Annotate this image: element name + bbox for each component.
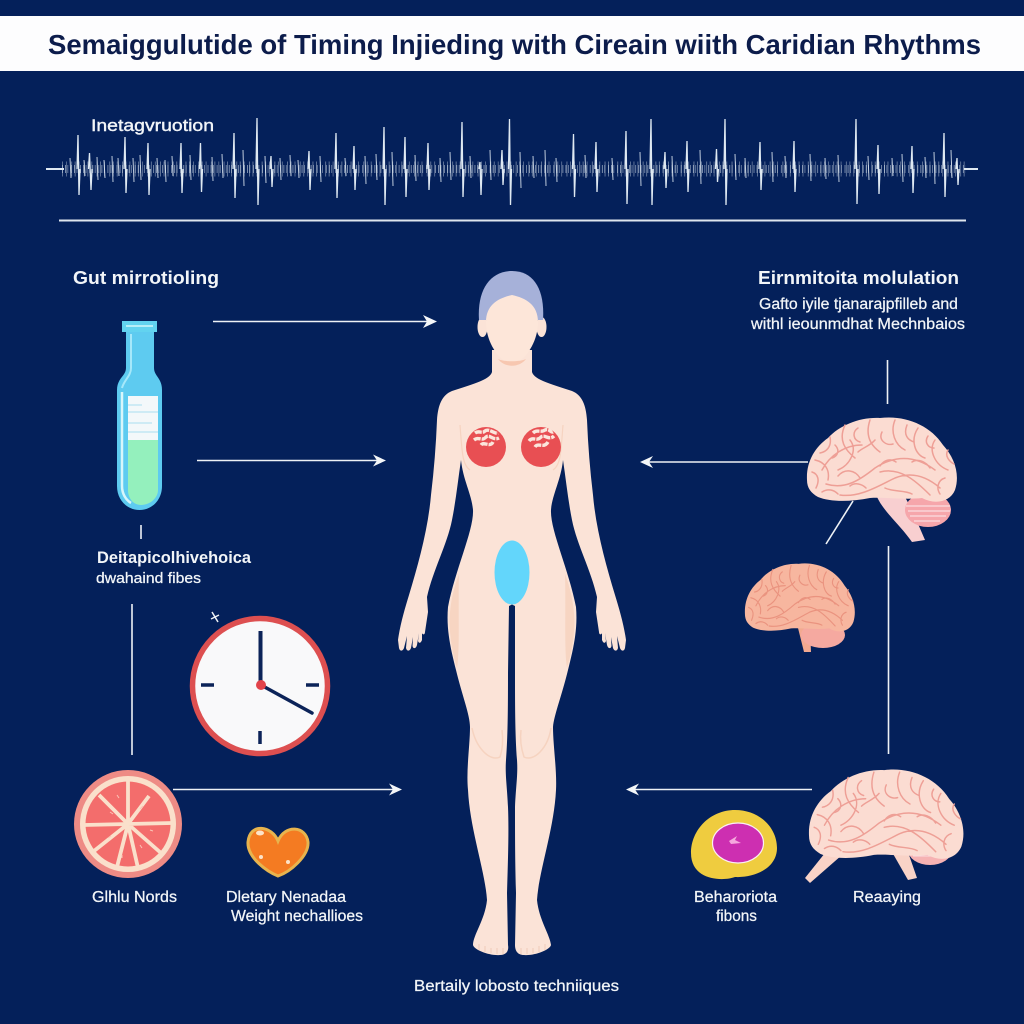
panel: circadian modulation text: withl ieounmdhat Mechnbaios [750,316,965,333]
organ: left lung [466,427,506,467]
reaaying label: Reaaying [853,889,921,906]
icon: upper brain [807,417,957,542]
arrow: brain to legs [626,784,812,796]
ECG waveform panel [46,116,978,205]
panel: circadian modulation text: Gafto iyile tjanarajpfilleb and [759,296,958,313]
panel: circadian modulation text: Eirnmitoita molulation [758,267,959,288]
organ: right lung [521,427,561,467]
behavior label [694,889,777,925]
footer label: Bertaily lobosto techniiques [414,978,619,995]
arrow: test tube to head [213,315,437,328]
waveform label: Inetagvruotion [91,116,214,135]
dietary weight label: Dletary Nenadaa [226,889,346,906]
icon: middle brain [745,563,855,652]
organ: blue stomach [494,540,530,604]
arrow: grapefruit to legs [173,784,402,796]
icon: test tube [117,321,162,510]
panel: gut microbiome heading: Gut mirrotioling [73,267,219,288]
arrow: test tube to torso [197,454,386,466]
panel: circadian modulation text [750,267,965,333]
connector lines [132,360,888,755]
human body figure [398,271,626,955]
dietary label [96,549,252,587]
dietary label: dwahaind fibes [96,571,201,587]
arrow: brain to torso [640,456,808,468]
dietary weight label [226,889,363,925]
icon: lower brain [805,770,963,883]
divider rule [59,220,966,222]
dietary weight label: Weight nechallioes [231,908,363,925]
icon: yellow cell [691,810,777,879]
title banner [0,16,1024,71]
body shading [450,425,574,758]
title banner: Semaiggulutide of Timing Injieding with Cireain wiith Caridian Rhythms [48,29,981,60]
connector tick [140,525,142,539]
dietary label: Deitapicolhivehoica [97,549,252,567]
icon: clock [192,612,328,754]
head [478,271,546,366]
behavior label: Beharoriota [694,889,777,906]
waveform trace [46,118,978,205]
grapefruit label: Glhlu Nords [92,889,177,906]
body silhouette [398,350,626,955]
toes [479,944,545,954]
icon: orange heart [248,828,308,876]
icon: grapefruit [74,770,182,878]
behavior label: fibons [716,908,757,925]
